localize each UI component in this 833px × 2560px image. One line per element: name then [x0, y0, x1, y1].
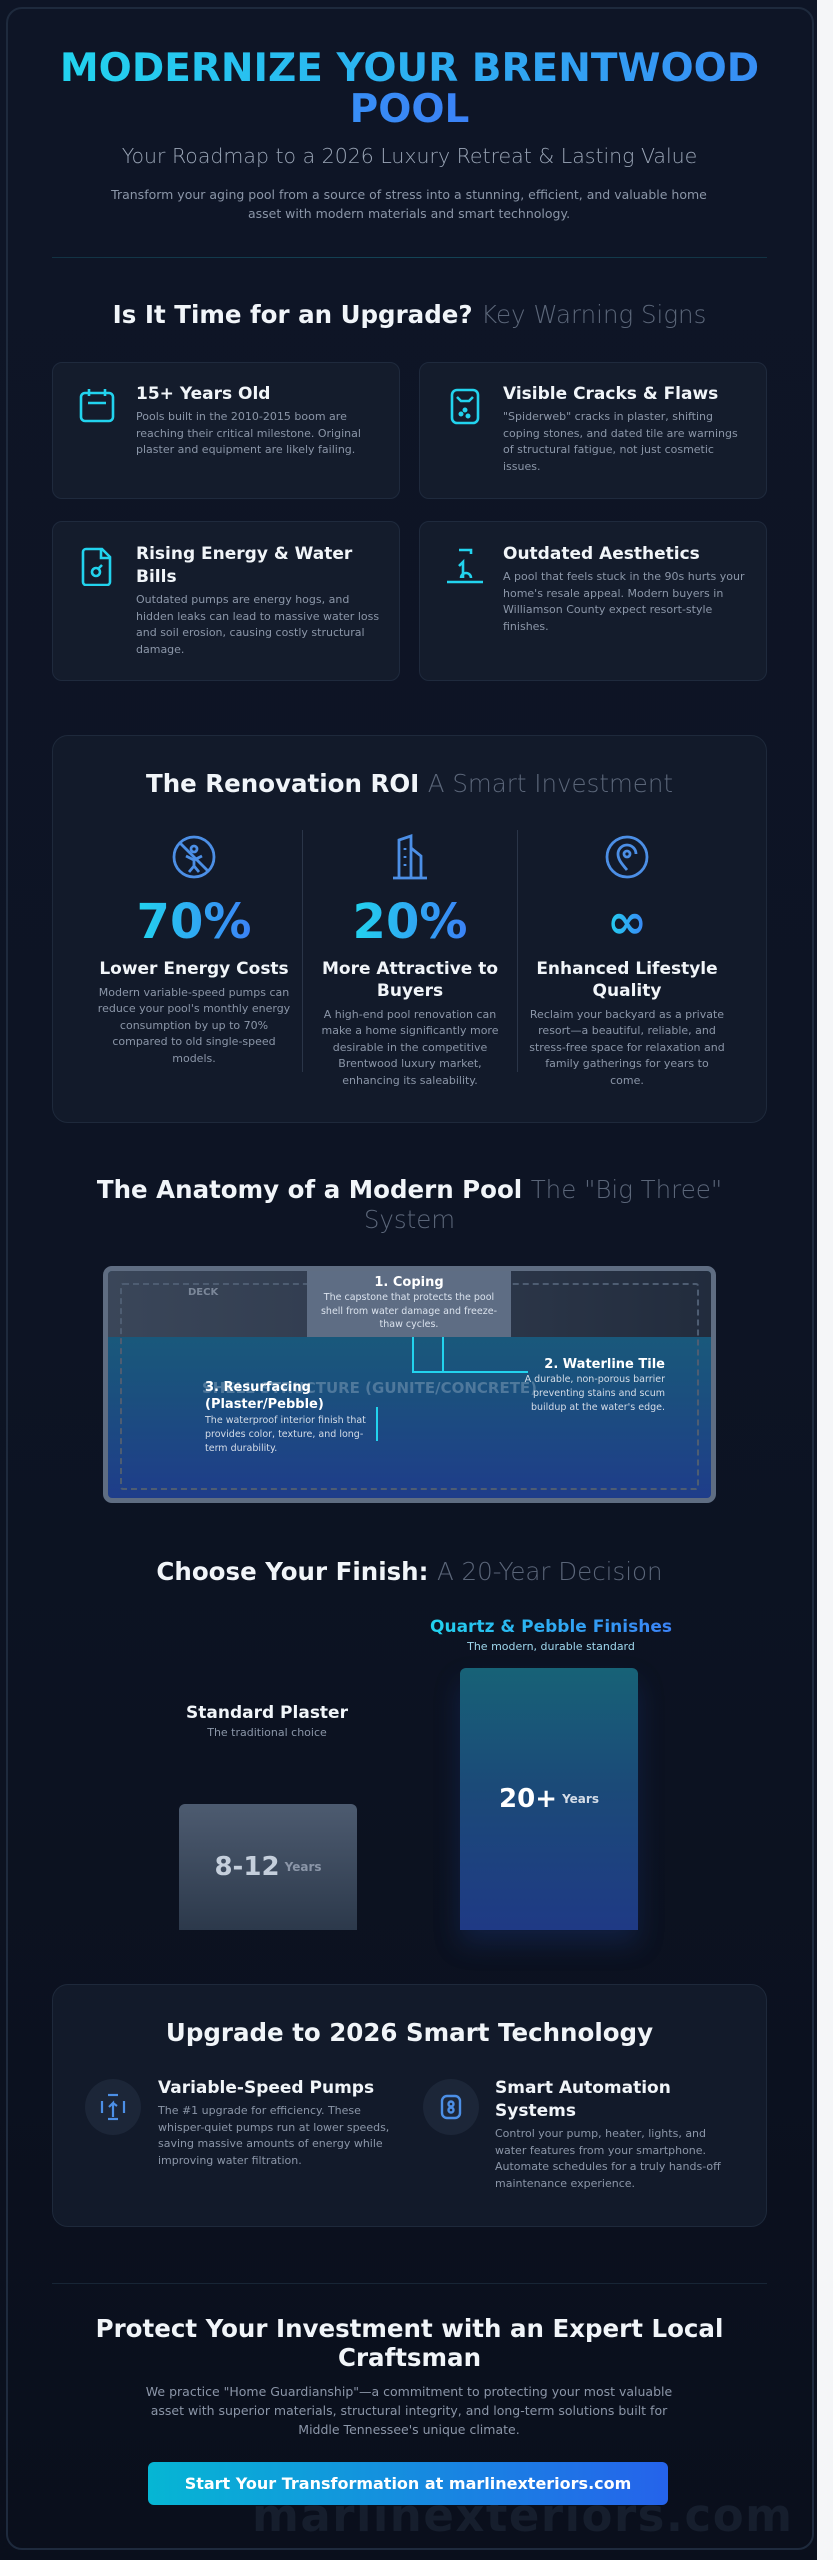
text: 15+ Years Old [136, 384, 270, 404]
stat: 70% [98, 836, 290, 1065]
subtitle: Your Roadmap to a 2026 Luxury Retreat & Lasting Value [122, 144, 697, 168]
stat: 20% [322, 834, 498, 1087]
button: call to action [148, 2462, 668, 2505]
intro text: Transform your aging pool from a source of stress into a stunning, efficient, and valuable home asset with modern materials and smart technology. [111, 187, 707, 221]
connector lines [412, 1337, 414, 1373]
panel: smart technology: Control your pump, heater, lights, and water features from your smartphone. Automate schedules for a truly hands-off maintenance experience. [495, 2127, 721, 2190]
text: Outdated pumps are energy hogs, and hidden leaks can lead to massive water loss and soil erosion, causing costly structural damage. [136, 593, 379, 656]
label: plaster [186, 1703, 348, 1739]
heading: choose finish: Choose Your Finish: A 20-Year Decision [156, 1557, 663, 1586]
label: quartz: Quartz & Pebble Finishes [430, 1617, 672, 1637]
closing text: We practice "Home Guardianship"—a commitment to protecting your most valuable asset with superior materials, structural integrity, and long-term solutions built for Middle Tennessee's unique climate. [146, 2384, 672, 2437]
bar: quartz: 20+ [499, 1784, 557, 1814]
bar: plaster: Years [285, 1860, 322, 1874]
callout: waterline tile: 2. Waterline Tile [544, 1357, 665, 1372]
card: 15+ years [52, 362, 400, 499]
panel: smart technology: Smart Automation Systems [495, 2078, 671, 2121]
stat: infinity: Enhanced Lifestyle Quality [536, 959, 718, 1001]
text: Rising Energy & Water Bills [136, 544, 352, 587]
label: quartz [430, 1617, 672, 1653]
text [136, 384, 361, 456]
card: cracks [419, 362, 767, 499]
title: POOL [350, 87, 469, 132]
bar: quartz: Years [562, 1792, 599, 1806]
feature: automation [423, 2078, 721, 2190]
label: deck: DECK [188, 1287, 218, 1298]
text: Outdated Aesthetics [503, 544, 700, 564]
bar: plaster: 8-12 [214, 1852, 280, 1882]
text: Visible Cracks & Flaws [503, 384, 718, 404]
stat: 20%: 20% [353, 894, 467, 950]
heading: protect investment: Protect Your Investment with an Expert Local Craftsman [96, 2314, 723, 2372]
icon: document [82, 548, 112, 586]
callout: resurfacing [204, 1380, 366, 1454]
icon: smart [423, 2079, 479, 2135]
watermark: marlinexteriors.com [252, 2489, 794, 2542]
panel: smart technology: Variable-Speed Pumps [158, 2078, 374, 2098]
stat: 70%: Modern variable-speed pumps can reduce your pool's monthly energy consumption by up to 70% compared to old single-speed models. [98, 986, 290, 1065]
icon: calendar [80, 389, 114, 422]
heading: The Renovation ROI A Smart Investment [146, 769, 673, 798]
stat: 70%: Lower Energy Costs [99, 959, 289, 979]
label: shell structure: SHELL STRUCTURE (GUNITE/CONCRETE) [202, 1379, 537, 1397]
stat: infinity: Reclaim your backyard as a private resort—a beautiful, reliable, and stress-free space for relaxation and family gatherings for years to come. [529, 1008, 725, 1087]
text: "Spiderweb" cracks in plaster, shifting coping stones, and dated tile are warnings of structural fatigue, not just cosmetic issues. [503, 410, 738, 473]
stat: 20%: More Attractive to Buyers [322, 959, 498, 1001]
stat: infinity [529, 836, 725, 1087]
diagram: pool anatomy [103, 1266, 716, 1503]
chart: finish lifespan [179, 1617, 672, 1952]
icon: pump [85, 2079, 141, 2135]
panel: smart technology: The #1 upgrade for efficiency. These whisper-quiet pumps run at lower speeds, saving massive amounts of energy while improving water filtration. [158, 2104, 389, 2166]
card: aesthetics [419, 521, 767, 681]
text: Pools built in the 2010-2015 boom are reaching their critical milestone. Original plaster and equipment are likely failing. [136, 410, 361, 456]
label: quartz: The modern, durable standard [467, 1640, 635, 1653]
button: call to action: Start Your Transformation at marlinexteriors.com [185, 2474, 631, 2493]
callout: coping [307, 1271, 511, 1337]
callout: waterline tile [524, 1357, 666, 1413]
text [136, 544, 379, 656]
feature: pumps [85, 2078, 389, 2166]
deck [108, 1271, 711, 1337]
label: plaster: Standard Plaster [186, 1703, 348, 1723]
stat: 70%: 70% [137, 894, 251, 950]
bar: quartz [460, 1668, 638, 1930]
callout: coping: 1. Coping [374, 1275, 444, 1290]
heading: Upgrade to 2026 Smart Technology [166, 2018, 653, 2047]
stat: 20%: A high-end pool renovation can make a home significantly more desirable in the competitive Brentwood luxury market, enhancing its saleability. [322, 1008, 498, 1087]
callout: coping: The capstone that protects the pool shell from water damage and freeze-thaw cycles. [321, 1292, 497, 1330]
text: A pool that feels stuck in the 90s hurts your home's resale appeal. Modern buyers in Williamson County expect resort-style finishes. [503, 570, 745, 633]
stat: infinity: ∞ [607, 894, 647, 950]
heading: anatomy: The Anatomy of a Modern Pool The "Big Three" System [97, 1175, 722, 1234]
icon: cracked tile [450, 388, 480, 424]
title [60, 46, 759, 132]
callout: resurfacing: The waterproof interior finish that provides color, texture, and long-term durability. [205, 1415, 366, 1454]
icon: outdated [447, 548, 483, 584]
panel: smart technology [52, 1984, 767, 2227]
heading: warning signs: Is It Time for an Upgrade? Key Warning Signs [113, 300, 706, 329]
bar: plaster [179, 1804, 357, 1930]
label: plaster: The traditional choice [207, 1726, 327, 1739]
callout: waterline tile: A durable, non-porous barrier preventing stains and scum buildup at the water's edge. [525, 1374, 665, 1413]
title: MODERNIZE YOUR BRENTWOOD [60, 46, 759, 91]
panel: renovation ROI [52, 735, 767, 1123]
card: energy bills [52, 521, 400, 681]
callout: resurfacing: 3. Resurfacing (Plaster/Pebble) [205, 1380, 324, 1412]
